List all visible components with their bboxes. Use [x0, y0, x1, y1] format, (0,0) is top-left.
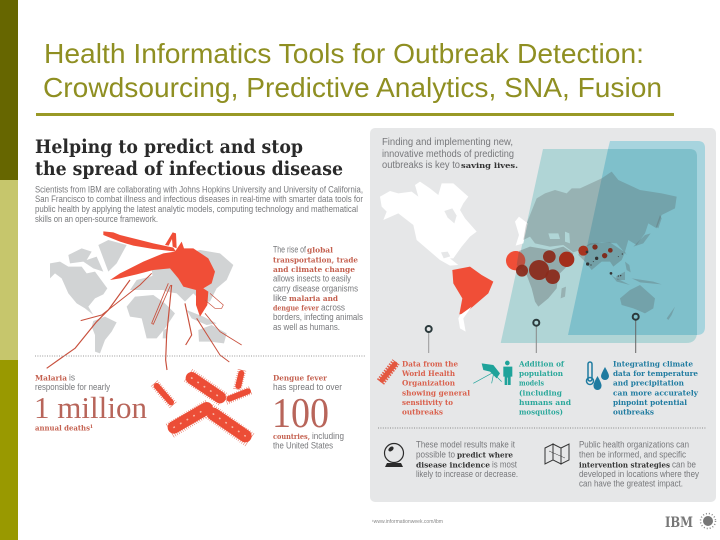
text: predict where: possible to	[416, 449, 455, 459]
icon: bacterium	[380, 362, 396, 382]
text: intervention strategies: intervention strategies	[579, 460, 670, 469]
slide title	[43, 38, 662, 103]
intro text: skills on an open-source framework.	[35, 214, 158, 224]
dengue stat: countries,	[273, 432, 310, 441]
column: population models: population	[519, 369, 563, 378]
malaria stat: annual deaths¹	[35, 424, 93, 433]
panel intro text: Finding and implementing new,	[382, 137, 513, 148]
germ cilia	[154, 370, 251, 440]
title rule	[36, 113, 674, 116]
mosquito body	[103, 231, 215, 317]
intro text: San Francisco to combat illness and infectious diseases in real-time with smarter data tools for	[35, 194, 363, 204]
panel world map: americas	[380, 182, 528, 332]
mosquito side text: as well as humans.	[273, 322, 340, 332]
column: climate data: can more accurately	[613, 388, 699, 397]
mosquito side text	[273, 245, 363, 332]
dengue stat: 100	[272, 391, 329, 437]
icon: thermometer and drops	[586, 362, 609, 390]
text: predict where: disease incidence	[416, 460, 490, 469]
malaria stat	[34, 373, 147, 433]
dengue stat: Dengue fever	[273, 374, 328, 383]
grey world map	[50, 240, 233, 353]
dengue stat: the United States	[273, 440, 333, 450]
western europe edge	[515, 217, 528, 246]
india and south east asia	[578, 242, 625, 270]
column: population models: Addition of	[518, 360, 565, 369]
text: predict where: likely to increase or decrease.	[416, 469, 518, 479]
intro text	[35, 184, 363, 224]
IBM logo	[665, 514, 716, 531]
column: population models: mosquitos)	[519, 408, 563, 417]
infographic heading	[35, 136, 343, 180]
mosquito side text: allows insects to easily	[273, 274, 351, 284]
malaria stat: 1 million	[34, 390, 147, 425]
text: intervention strategies: can have the greatest impact.	[579, 479, 683, 489]
panel world map: old world	[516, 172, 677, 320]
mosquito side text: borders, infecting animals	[273, 312, 363, 322]
text: intervention strategies: can be	[672, 459, 696, 469]
mosquito side text: carry disease organisms	[273, 283, 358, 293]
infographic heading: Helping to predict and stop	[35, 136, 303, 158]
column: population models: (including	[519, 388, 563, 397]
column: WHO data: showing general	[402, 388, 470, 397]
islands	[561, 215, 675, 320]
icon: folded map	[545, 444, 569, 464]
panel intro text: saving lives.	[461, 161, 518, 170]
intro text: public health by applying the latest analytic models, computing technology and mathematical	[35, 204, 358, 214]
text: predict where	[416, 440, 518, 479]
mosquito side text: dengue fever	[273, 304, 320, 313]
americas, greenland, africa, europe	[50, 240, 180, 353]
column: climate data: and precipitation	[613, 379, 684, 388]
column: population models	[518, 360, 572, 417]
column: WHO data: outbreaks	[402, 408, 443, 417]
mosquito side text: and climate change	[273, 265, 355, 274]
germ spots	[174, 378, 245, 436]
panel: right	[370, 128, 716, 502]
column: WHO data: sensitivity to	[402, 398, 453, 407]
intro text: Scientists from IBM are collaborating with Johns Hopkins University and University of California,	[35, 184, 363, 194]
bacteria	[154, 370, 251, 440]
text: predict where: These model results make it	[416, 440, 515, 450]
eurasia	[523, 172, 677, 255]
column: WHO data: Organization	[402, 379, 455, 388]
malaria stat: responsible for nearly	[35, 382, 110, 392]
dengue stat	[272, 374, 344, 450]
dengue stat: including	[312, 431, 344, 441]
column: climate data: outbreaks	[613, 408, 654, 417]
mosquito side text: malaria and	[289, 294, 339, 303]
column: climate data: Integrating climate	[613, 360, 693, 369]
north america	[380, 182, 477, 266]
text: intervention strategies	[579, 440, 699, 489]
panel intro text: outbreaks is key to	[382, 160, 460, 171]
dengue stat: has spread to over	[273, 382, 342, 392]
asia and australia	[152, 250, 233, 343]
south america	[452, 267, 493, 314]
mosquito side text: global	[307, 246, 333, 255]
mosquito legs	[47, 273, 172, 370]
column: population models: models	[519, 379, 544, 388]
panel intro text	[382, 137, 518, 171]
column: climate data	[613, 360, 699, 417]
slide title: Health Informatics Tools for Outbreak Detection:	[44, 38, 644, 69]
mosquito side text: across	[321, 303, 345, 313]
pin: data source 1	[426, 326, 432, 353]
australia	[620, 285, 655, 313]
infographic heading: the spread of infectious disease	[35, 158, 343, 180]
africa	[517, 247, 573, 307]
text: intervention strategies: Public health organizations can	[579, 440, 689, 450]
left colour bar	[0, 0, 18, 540]
icon: crystal ball	[384, 444, 404, 467]
west africa circle	[506, 251, 525, 270]
footnote: ¹www.informationweek.com/ibm	[372, 519, 443, 525]
germ bodies	[157, 373, 248, 436]
text: intervention strategies: developed in locations where they	[579, 469, 699, 479]
column: WHO data: Data from the	[402, 360, 458, 369]
pin: data source 2	[533, 320, 539, 353]
outbreak circles	[516, 244, 623, 284]
text: predict where: is most	[492, 459, 517, 469]
column: WHO data: World Health	[401, 369, 455, 378]
teal bands	[501, 141, 705, 343]
text: predict where: predict where	[457, 450, 513, 459]
malaria stat: Malaria	[35, 374, 67, 383]
icon: mosquito and person	[473, 361, 512, 385]
column: climate data: data for temperature	[613, 369, 698, 378]
pin: data source 3	[633, 314, 639, 353]
malaria stat: is	[69, 373, 75, 383]
column: WHO data	[401, 360, 470, 417]
column: climate data: pinpoint potential	[613, 398, 687, 407]
text: intervention strategies: then be informed, and specific	[579, 449, 686, 459]
mosquito side text: like	[273, 293, 287, 303]
panel intro text: innovative methods of predicting	[382, 149, 514, 160]
slide title: Crowdsourcing, Predictive Analytics, SNA, Fusion	[43, 72, 662, 103]
mosquito	[47, 231, 242, 370]
mosquito side text: The rise of	[273, 245, 306, 255]
mosquito side text: transportation, trade	[273, 255, 358, 264]
column: population models: humans and	[519, 398, 572, 407]
IBM logo: IBM	[665, 515, 693, 531]
